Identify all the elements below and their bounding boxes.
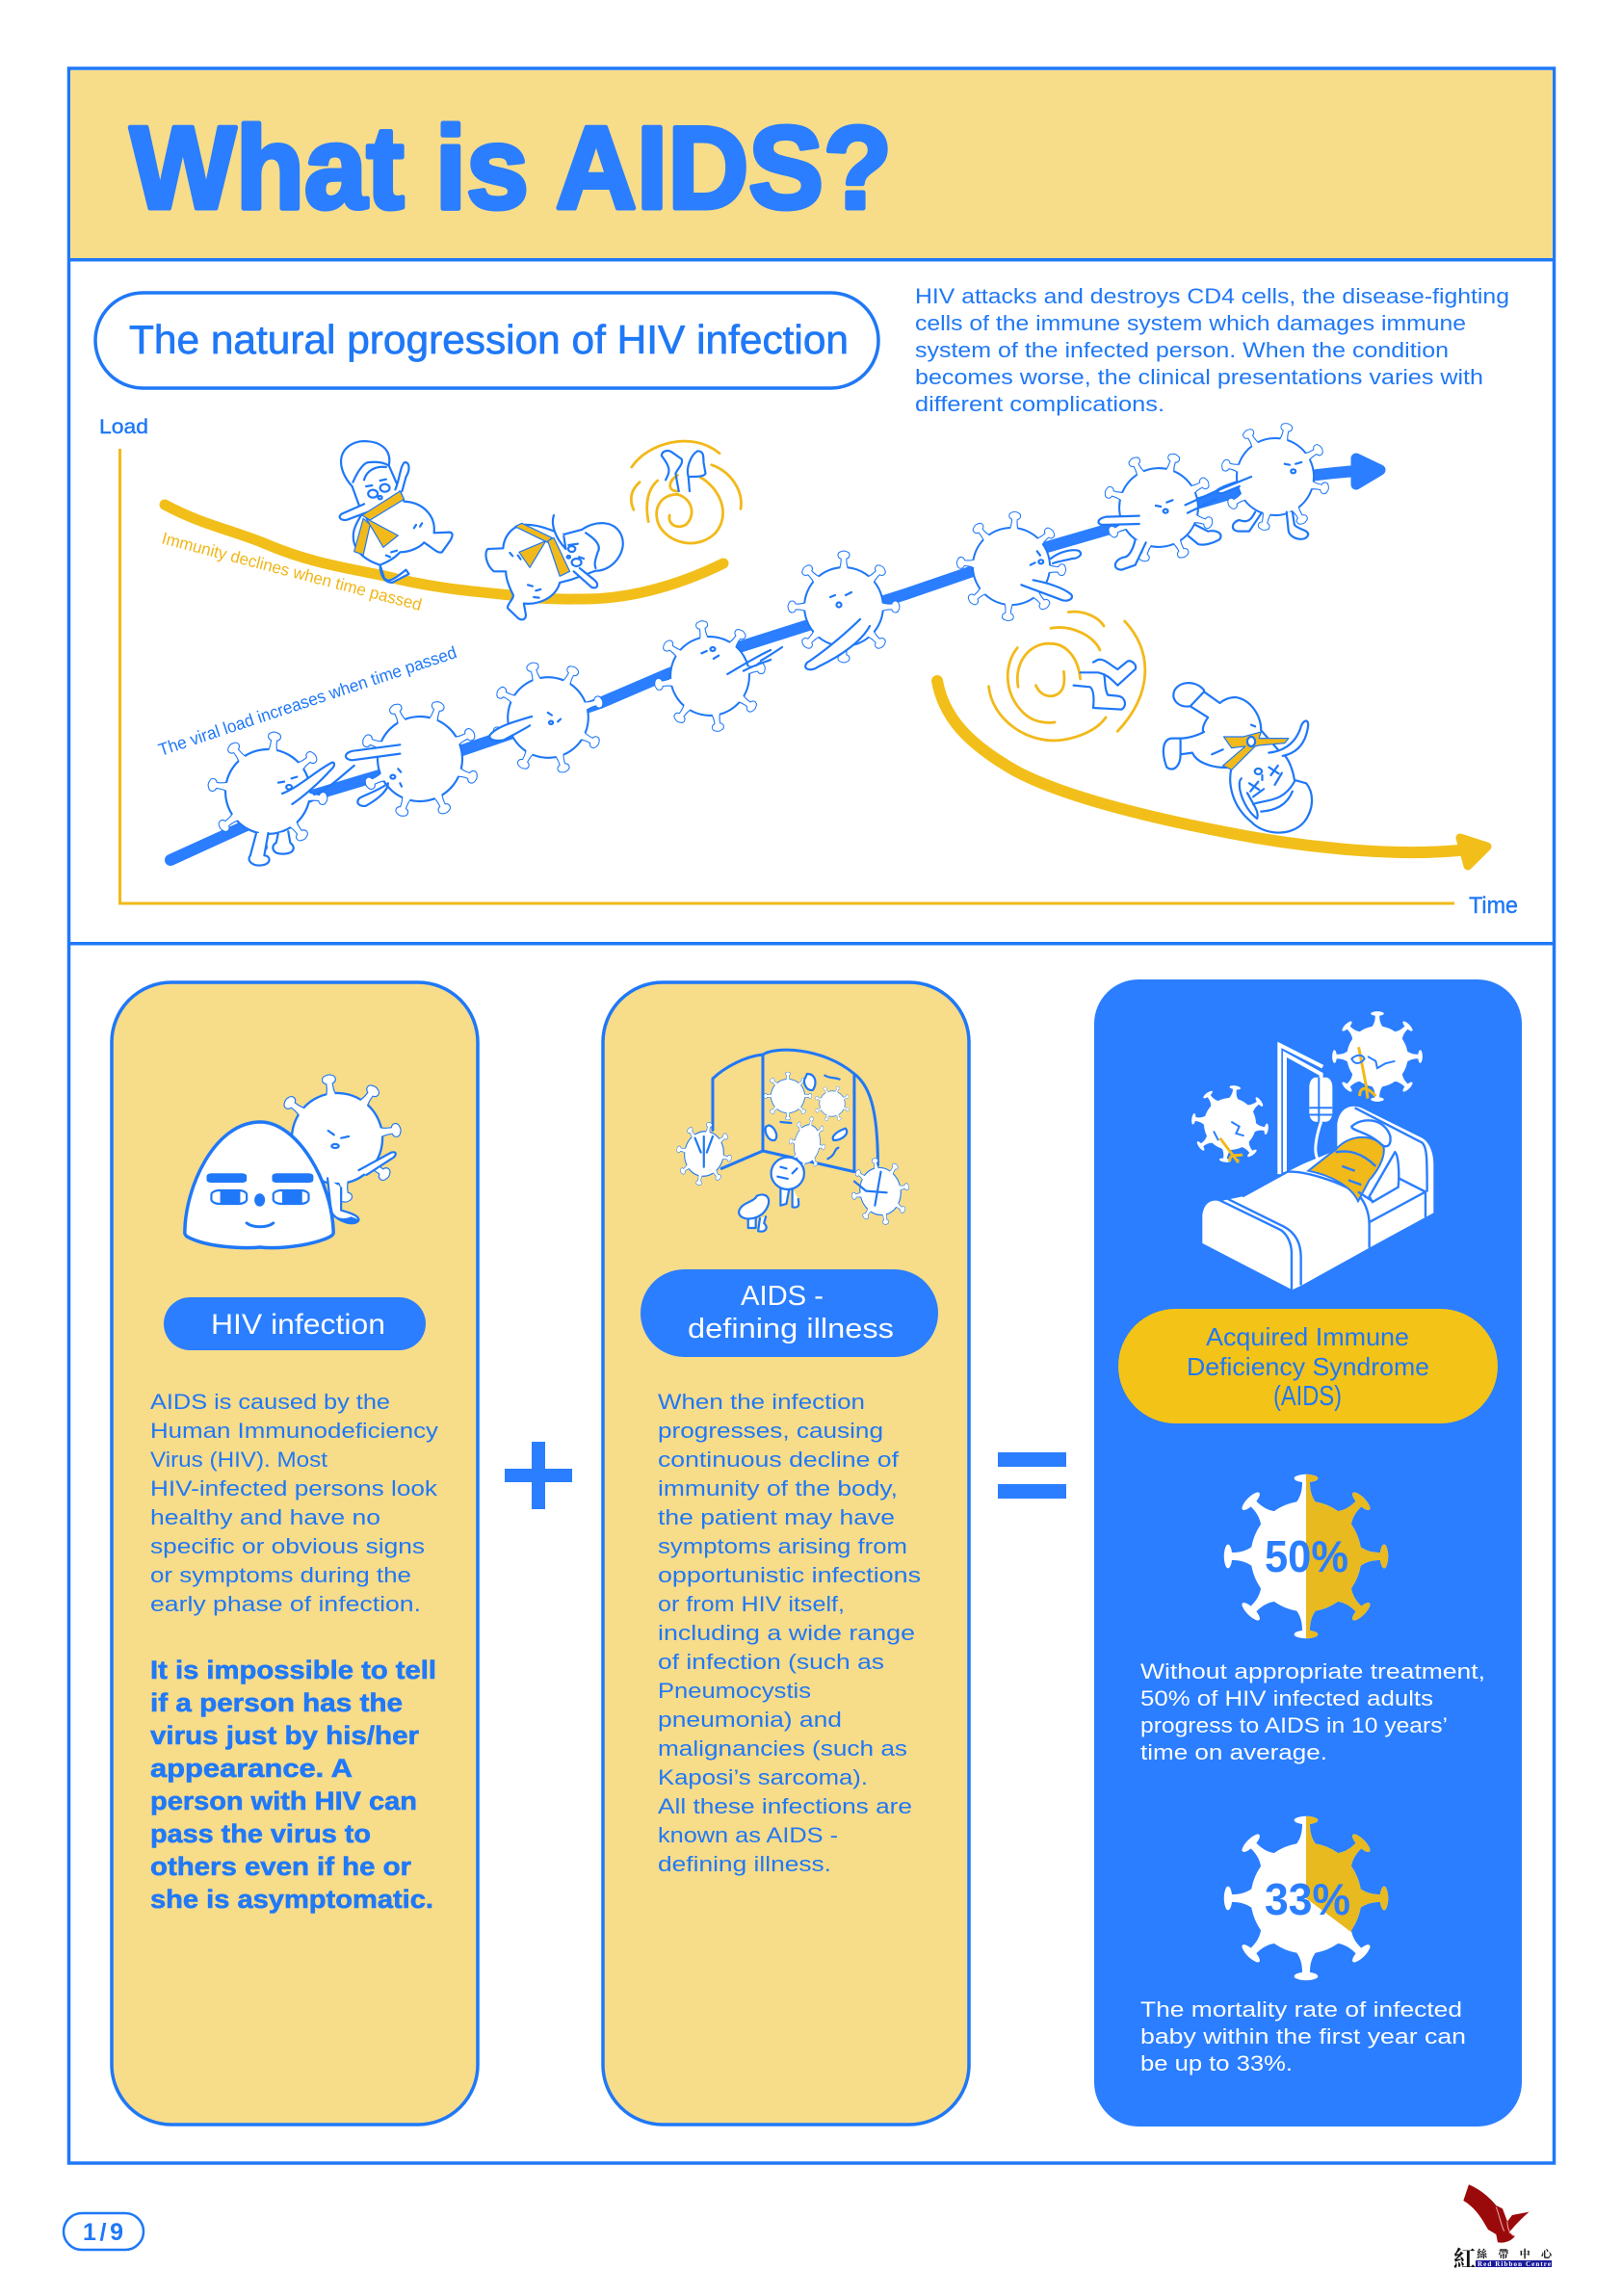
pill: HIV infection: HIV infection [211,1309,385,1341]
header band [68,70,1555,262]
stat icon: 33%: 33% [1265,1874,1350,1924]
text: bold warning: she is asymptomatic. [150,1885,433,1914]
virus 5 [761,552,899,669]
text: AIDS-defining explanation: progresses, causing [658,1419,883,1443]
axes [119,449,1454,903]
illustration: opportunistic infections [671,1050,914,1232]
text: bold warning: pass the virus to [150,1819,371,1848]
text: AIDS-defining explanation: continuous decline of [658,1448,900,1472]
stat icon: 33% [1224,1816,1388,1980]
text: HIV explanation: early phase of infection. [150,1592,421,1616]
virus 6 [954,509,1081,624]
pill: AIDS full name: Deficiency Syndrome [1187,1352,1429,1381]
axis label: load: Load [99,416,148,438]
heading pill: natural progression: The natural progression of HIV infection [129,317,849,362]
text: bold warning: It is impossible to tell [150,1656,436,1684]
viral load arrow [170,458,1380,860]
stat text: 33%: baby within the first year can [1140,2024,1466,2048]
plus sign [505,1442,572,1509]
stat icon: 50% [1224,1474,1388,1638]
pill: HIV infection [164,1297,426,1350]
logo: Red Ribbon Centre: Red Ribbon Centre [1478,2260,1551,2268]
text: AIDS-defining explanation: the patient may have [658,1505,895,1529]
virus 4 [646,613,773,740]
illustration: patient in bed [1187,1011,1433,1290]
virus 2 [345,684,495,834]
text: HIV explanation: AIDS is caused by the [150,1390,390,1414]
text: AIDS-defining explanation: including a wide range [658,1621,915,1645]
text: HIV explanation: or symptoms during the [150,1563,411,1587]
description text: becomes worse, the clinical presentations varies with [915,365,1483,389]
pill: AIDS-defining illness: defining illness [688,1314,894,1344]
virus 8 [1211,412,1340,541]
virus 1 [201,725,354,866]
text: bold warning: appearance. A [150,1754,353,1783]
text: AIDS-defining explanation: symptoms arising from [658,1534,907,1558]
stat text: 33% [1140,1997,1466,2075]
stat text: 50%: Without appropriate treatment, [1140,1659,1485,1683]
text: AIDS-defining explanation: pneumonia) and [658,1708,842,1732]
pill: AIDS full name: Acquired Immune [1206,1322,1409,1351]
pill: AIDS-defining illness [641,1269,938,1357]
immune cell: falling [485,515,623,619]
stat text: 33%: The mortality rate of infected [1140,1997,1462,2022]
description text: system of the infected person. When the condition [915,338,1449,362]
description text: HIV attacks and destroys CD4 cells, the disease-fighting [915,284,1509,308]
page number pill [64,2213,144,2250]
pill: AIDS-defining illness: AIDS - [741,1281,824,1312]
text: AIDS-defining explanation: known as AIDS - [658,1823,838,1847]
decline arrow [937,681,1487,866]
text: HIV explanation: specific or obvious signs [150,1534,425,1558]
chart: natural progression [99,412,1518,919]
stat text: 50%: progress to AIDS in 10 years’ [1140,1713,1448,1737]
virus 3 [478,647,618,788]
description text: different complications. [915,392,1164,416]
stat text: 50%: time on average. [1140,1740,1327,1764]
stat text: 50%: 50% of HIV infected adults [1140,1686,1433,1710]
illustration: virus behind person [185,1066,409,1248]
text: AIDS-defining explanation: malignancies (such as [658,1736,907,1761]
axis label: time: Time [1469,893,1518,919]
panel: AIDS-defining illness [603,982,969,2125]
description text: cells of the immune system which damages immune [915,311,1466,335]
stat icon: 50%: 50% [1265,1531,1348,1581]
text: bold warning: others even if he or [150,1852,412,1881]
text: AIDS-defining explanation [658,1390,921,1876]
heading pill: natural progression [95,293,878,388]
logo: Red Ribbon Centre [1453,2184,1554,2271]
text: AIDS-defining explanation: defining illness. [658,1852,831,1876]
equals sign [998,1452,1066,1499]
stat text: 33%: be up to 33%. [1140,2051,1293,2075]
divider [68,942,1555,946]
text: AIDS-defining explanation: Kaposi’s sarcoma). [658,1765,868,1789]
stat text: 50% [1140,1659,1485,1764]
text: AIDS-defining explanation: of infection (such as [658,1650,884,1674]
virus 7 [1089,438,1251,577]
text: AIDS-defining explanation: All these infections are [658,1794,912,1818]
immune cell: collapsed [1164,683,1312,833]
immune cell: sliding [340,441,453,583]
title: What is AIDS? [130,102,892,233]
text: bold warning: virus just by his/her [150,1721,420,1750]
pill: AIDS full name [1118,1309,1498,1423]
text: bold warning [150,1656,436,1914]
label: viral load increases: The viral load increases when time passed [156,642,459,760]
text: HIV explanation: Virus (HIV). Most [150,1448,328,1472]
text: bold warning: person with HIV can [150,1787,417,1815]
icon: red ribbon [1463,2184,1530,2243]
text: AIDS-defining explanation: Pneumocystis [658,1679,811,1703]
swirl: vanishing cell 1 [631,441,741,543]
swirl: vanishing cell 2 [988,612,1145,741]
text: HIV explanation [150,1390,439,1616]
text: HIV explanation: Human Immunodeficiency [150,1419,439,1443]
page number pill: 1/9 [83,2219,123,2246]
panel: HIV infection [112,982,478,2125]
logo: Red Ribbon Centre: 絲 帶 中 心 [1477,2247,1554,2260]
text: AIDS-defining explanation: or from HIV itself, [658,1592,845,1616]
text: HIV explanation: healthy and have no [150,1505,380,1529]
panel: AIDS [1094,979,1522,2126]
label: immunity declines: Immunity declines when time passed [160,529,424,614]
text: AIDS-defining explanation: immunity of the body, [658,1476,898,1500]
description text [915,284,1509,416]
logo: Red Ribbon Centre: 紅 [1453,2247,1476,2271]
text: AIDS-defining explanation: opportunistic infections [658,1563,921,1587]
text: bold warning: if a person has the [150,1688,403,1717]
immunity curve [165,505,723,599]
text: AIDS-defining explanation: When the infection [658,1390,865,1414]
text: HIV explanation: HIV-infected persons look [150,1476,438,1500]
pill: AIDS full name: (AIDS) [1273,1381,1342,1412]
